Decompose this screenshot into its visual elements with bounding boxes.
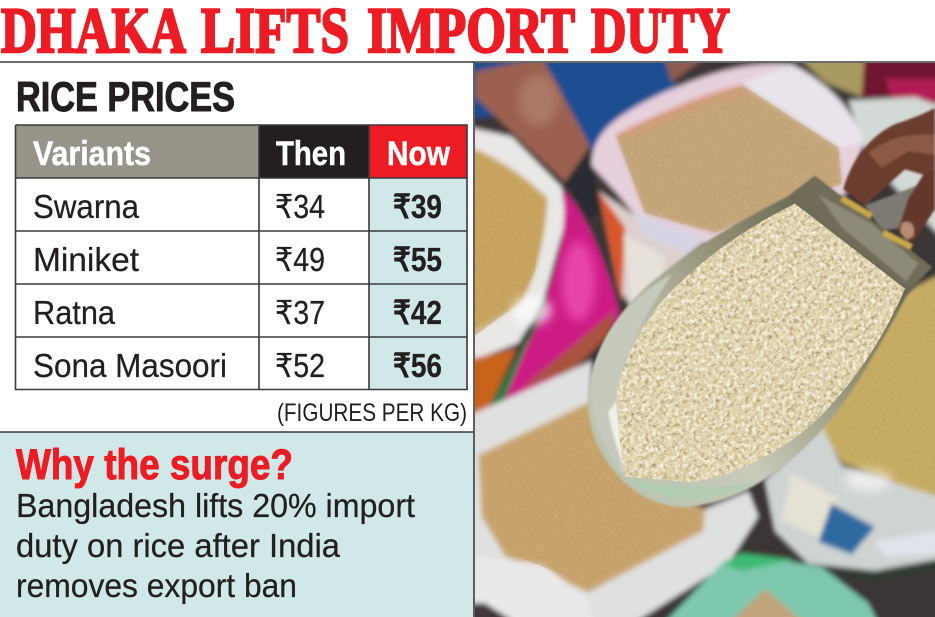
- callout body text: removes export ban: [16, 567, 297, 604]
- sack texture and highlights: [475, 75, 935, 585]
- bottom green sack: [645, 553, 888, 617]
- photo: rice sacks and metal scoop: [455, 28, 935, 617]
- row: Sona Masoori: ₹56: [393, 347, 442, 384]
- row: Swarna: ₹34: [275, 188, 325, 225]
- row: Sona Masoori: ₹52: [275, 347, 325, 384]
- callout heading: Why the surge?: [16, 441, 293, 489]
- callout body text: [16, 487, 415, 604]
- heading: rice prices: RICE PRICES: [16, 73, 235, 120]
- metal scoop: [588, 177, 932, 507]
- now column shading: [369, 178, 467, 389]
- blurred background sacks: [455, 28, 935, 617]
- row: Miniket: [33, 241, 442, 278]
- table header: Then: [276, 135, 346, 173]
- left sack: [462, 126, 566, 365]
- scooped rice: [617, 204, 905, 482]
- callout body text: duty on rice after India: [16, 527, 341, 564]
- row: Swarna: ₹39: [393, 188, 442, 225]
- row: Swarna: Swarna: [33, 188, 140, 225]
- table header: Variants: [33, 135, 151, 173]
- right rice and sack: [818, 267, 935, 506]
- callout body text: Bangladesh lifts 20% import: [16, 487, 415, 524]
- row: Sona Masoori: [33, 347, 442, 384]
- price table: [15, 125, 467, 390]
- row: Miniket: ₹49: [275, 241, 325, 278]
- row: Sona Masoori: Sona Masoori: [33, 347, 227, 384]
- hand: [843, 108, 935, 242]
- panel: surge explanation background: [0, 432, 474, 617]
- title: [1, 0, 730, 67]
- row: Ratna: Ratna: [33, 294, 116, 331]
- row: Ratna: [33, 294, 442, 331]
- row: Ratna: ₹37: [275, 294, 325, 331]
- row: Ratna: ₹42: [393, 294, 442, 331]
- lower left sack: [462, 361, 758, 617]
- table footnote: (FIGURES PER KG): [277, 399, 467, 427]
- table header: [15, 125, 467, 178]
- row: Swarna: [33, 188, 442, 225]
- table grid: [15, 125, 467, 390]
- row: Miniket: Miniket: [33, 241, 139, 278]
- middle sack: [592, 64, 863, 245]
- table header: Now: [387, 135, 450, 173]
- row: Miniket: ₹55: [393, 241, 442, 278]
